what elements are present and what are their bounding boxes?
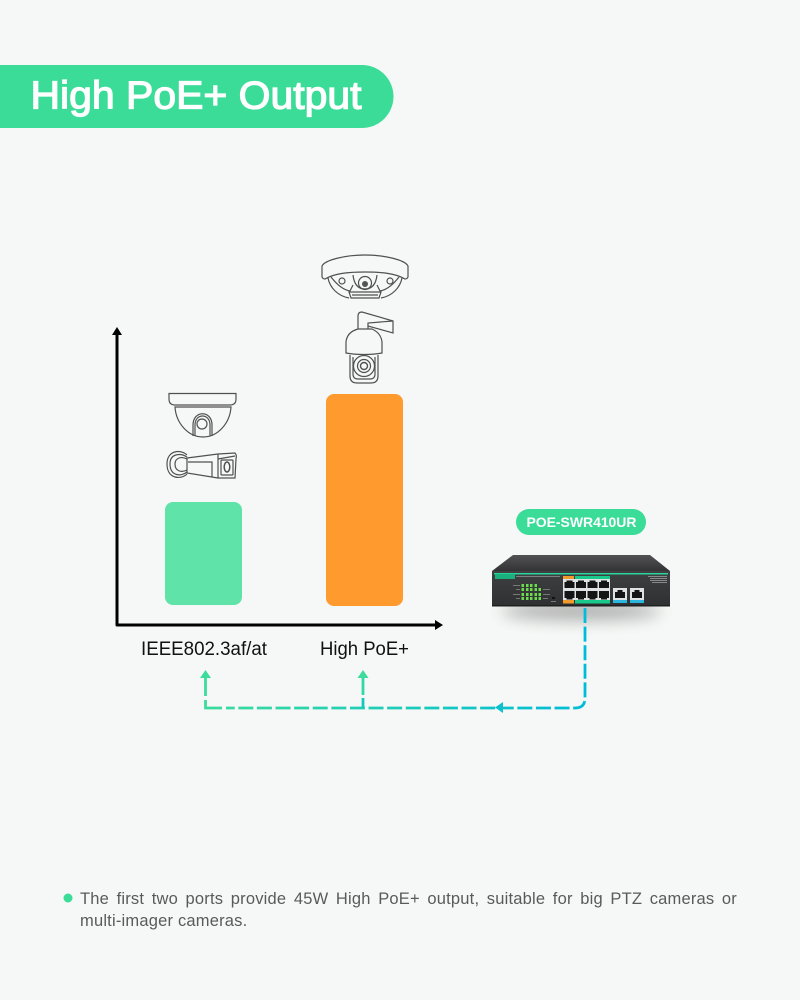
bar: High PoE+ — [326, 394, 403, 606]
bullet marker — [64, 894, 72, 902]
status LEDs — [522, 584, 541, 600]
LED captions — [513, 585, 556, 602]
bar: IEEE802.3af/at — [165, 502, 242, 605]
bar chart — [112, 327, 443, 660]
title banner: High PoE+ Output — [30, 74, 362, 118]
arrowhead: to IEEE802.3af/at — [200, 670, 211, 678]
model label pill — [516, 509, 646, 535]
label: IEEE802.3af/at: IEEE802.3af/at — [141, 639, 268, 660]
title banner — [0, 65, 394, 128]
chart axes — [112, 327, 443, 630]
network switch — [492, 555, 670, 620]
model label pill: POE-SWR410UR — [526, 514, 636, 530]
uplink ports — [613, 588, 644, 600]
arrowhead: to High PoE+ — [358, 670, 368, 678]
icon: dome camera — [169, 394, 236, 437]
switch spec text marks — [648, 576, 667, 583]
label: High PoE+: High PoE+ — [320, 639, 409, 660]
description text: The first two ports provide 45W High PoE+ output, suitable for big PTZ cameras or multi-imager cameras. — [80, 890, 737, 930]
icon: bullet camera — [167, 452, 236, 478]
PoE ports — [563, 579, 610, 600]
connection arrows — [200, 608, 585, 713]
icon: multi-imager camera — [322, 255, 408, 298]
port tags — [563, 576, 644, 604]
arrowhead: flow direction — [495, 702, 503, 713]
icon: PTZ camera — [346, 312, 393, 383]
